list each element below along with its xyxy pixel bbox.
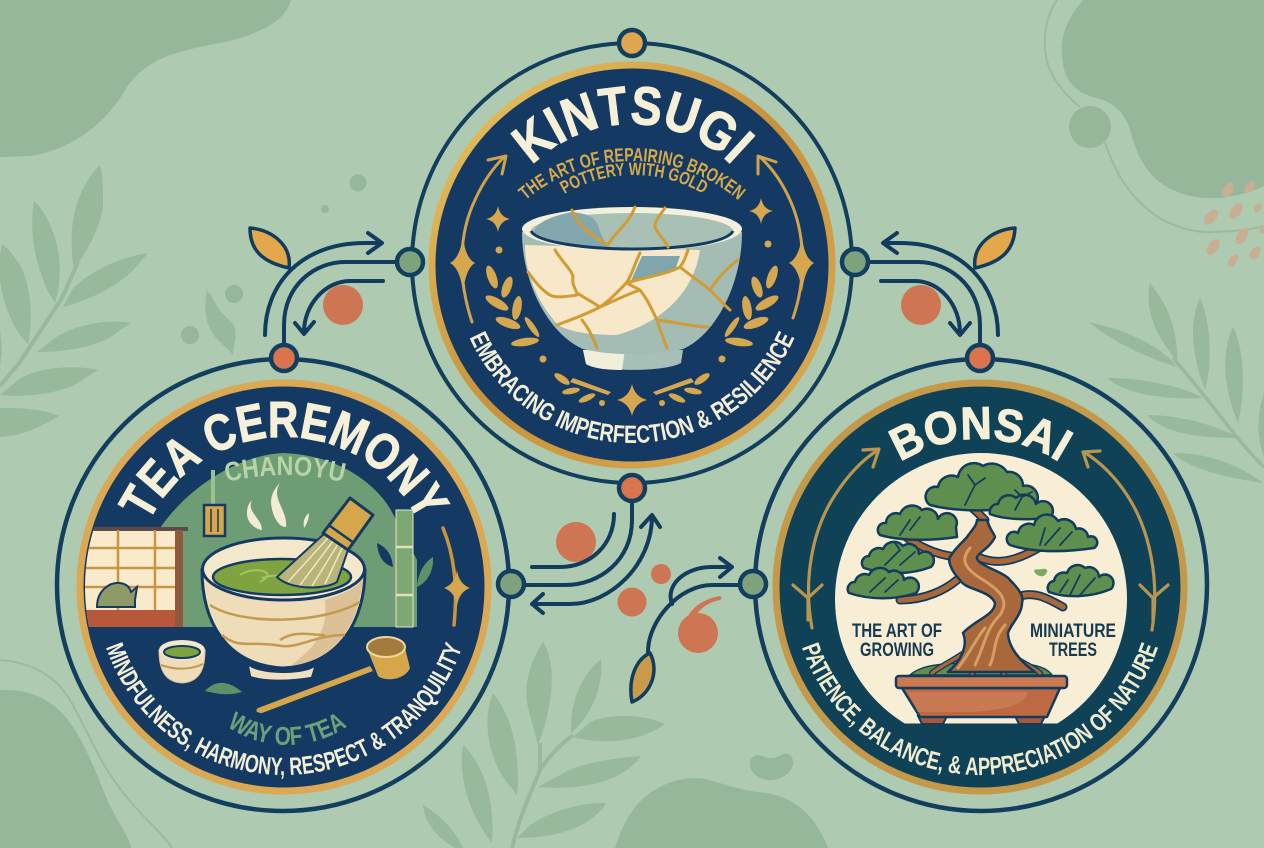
panel: tea ceremony xyxy=(54,357,511,814)
connecting line xyxy=(525,503,632,585)
teapot xyxy=(97,583,137,607)
small leaf xyxy=(1034,569,1047,576)
connecting line with branch arrow xyxy=(648,558,738,652)
arrow: left ring xyxy=(462,156,506,322)
icon: laurel left xyxy=(483,264,541,348)
accent circles xyxy=(556,522,722,653)
icon: bonsai pot xyxy=(896,676,1067,724)
foliage top right xyxy=(990,495,1053,519)
trunk xyxy=(948,520,1035,672)
hanging scroll xyxy=(211,470,215,505)
connecting line xyxy=(868,262,980,345)
outer ring xyxy=(57,359,509,811)
node: bonsai left xyxy=(740,571,766,597)
icon: repaired bowl xyxy=(522,207,742,370)
branches outline xyxy=(897,500,1063,607)
icon: bottom sprays xyxy=(553,371,711,405)
icon: star xyxy=(444,570,470,606)
icon: matcha bowl xyxy=(202,538,365,681)
shoji window xyxy=(85,530,183,627)
foliage twigs xyxy=(870,475,1095,595)
bonsai text left xyxy=(852,621,942,661)
connector: kintsugi to tea ceremony and bonsai, bottom xyxy=(525,503,738,702)
icon: steam xyxy=(247,483,309,530)
soil xyxy=(910,662,1052,675)
bonsai text right: MINIATURE xyxy=(1030,621,1116,642)
scene xyxy=(85,453,433,627)
node: tea ceremony right xyxy=(498,571,524,597)
connector: kintsugi to tea ceremony xyxy=(250,228,398,345)
trunk highlights xyxy=(958,548,1005,668)
node: kintsugi right xyxy=(842,249,868,275)
panel: kintsugi xyxy=(410,42,854,484)
foliage left low xyxy=(848,568,919,598)
badge disc xyxy=(432,65,832,465)
connecting line xyxy=(284,262,398,345)
foliage left mid xyxy=(862,542,934,573)
node: kintsugi bottom xyxy=(619,475,645,501)
blue patch xyxy=(630,256,680,283)
title: KINTSUGI xyxy=(510,86,756,164)
arrow: towards kintsugi xyxy=(883,233,998,335)
bonsai text right: TREES xyxy=(1049,640,1097,661)
arrow: left ring xyxy=(793,449,879,628)
arrow: towards kintsugi and tea ceremony xyxy=(532,515,660,613)
outer ring xyxy=(755,359,1207,811)
icon: laurel right xyxy=(723,264,781,348)
green arch xyxy=(160,453,417,627)
leaf: small centre-left xyxy=(205,290,236,355)
icon: bamboo ladle xyxy=(256,637,410,713)
subtitle: chanoyu: CHANOYU xyxy=(225,456,346,481)
accent circle xyxy=(901,285,941,325)
gold cracks xyxy=(572,207,668,247)
bowl body xyxy=(522,232,742,354)
accent circle xyxy=(323,285,363,325)
roots xyxy=(932,650,1040,674)
leaf branch: right xyxy=(1089,283,1264,483)
decorative dots top right xyxy=(1201,179,1264,269)
arrow: right ring xyxy=(758,156,802,318)
foliage right low xyxy=(1048,565,1113,596)
badge disc xyxy=(80,383,488,791)
leaf branch: bottom xyxy=(423,642,665,848)
foliage right upper xyxy=(1007,515,1097,551)
bonsai text left: GROWING xyxy=(860,640,934,661)
subtitle: way of tea: WAY OF TEA xyxy=(230,711,347,746)
subtitle line 1: THE ART OF REPAIRING BROKEN xyxy=(517,148,746,200)
bonsai text right xyxy=(1030,621,1116,661)
icon: bamboo whisk xyxy=(277,498,373,587)
bowl rim xyxy=(522,207,742,251)
cream medallion xyxy=(835,453,1127,745)
icon: small cup xyxy=(159,640,205,683)
connector: kintsugi to bonsai xyxy=(868,228,1015,345)
bamboo xyxy=(396,510,413,627)
leaf branch: left xyxy=(0,165,148,437)
icon: gold leaf left xyxy=(250,228,289,268)
icon: gold leaf bottom xyxy=(631,653,654,702)
icon: bonsai tree xyxy=(848,463,1113,675)
arrow: right ring xyxy=(1083,451,1168,630)
arrow: towards tea ceremony xyxy=(532,514,614,567)
badge disc xyxy=(776,383,1184,791)
title: BONSAI xyxy=(888,406,1074,462)
tagline: MINDFULNESS, HARMONY, RESPECT & TRANQUILITY xyxy=(106,641,460,779)
arrow: towards tea ceremony xyxy=(295,281,383,334)
icon: tea leaf xyxy=(205,683,242,694)
tagline: EMBRACING IMPERFECTION & RESILIENCE xyxy=(470,330,794,443)
node: tea ceremony top xyxy=(271,345,297,371)
outer ring xyxy=(412,43,852,483)
tagline: PATIENCE, BALANCE, & APPRECIATION OF NATURE xyxy=(802,642,1158,776)
subtitle line 2: POTTERY WITH GOLD xyxy=(559,162,708,194)
arrow: towards bonsai xyxy=(881,281,970,335)
panel: bonsai xyxy=(753,357,1210,814)
arrow: towards kintsugi xyxy=(265,233,382,335)
foliage top xyxy=(926,463,1038,510)
icon: gold leaf right xyxy=(975,228,1015,268)
icon: diamonds and sparkles xyxy=(450,198,814,416)
title: TEA CEREMONY xyxy=(117,402,450,514)
node: bonsai top xyxy=(967,345,993,371)
arrow: right deco xyxy=(443,528,456,625)
foliage left upper xyxy=(878,506,957,540)
bowl foot xyxy=(583,350,683,370)
node: kintsugi left xyxy=(397,249,423,275)
node: kintsugi top xyxy=(619,30,645,56)
bonsai text left: THE ART OF xyxy=(852,621,942,642)
